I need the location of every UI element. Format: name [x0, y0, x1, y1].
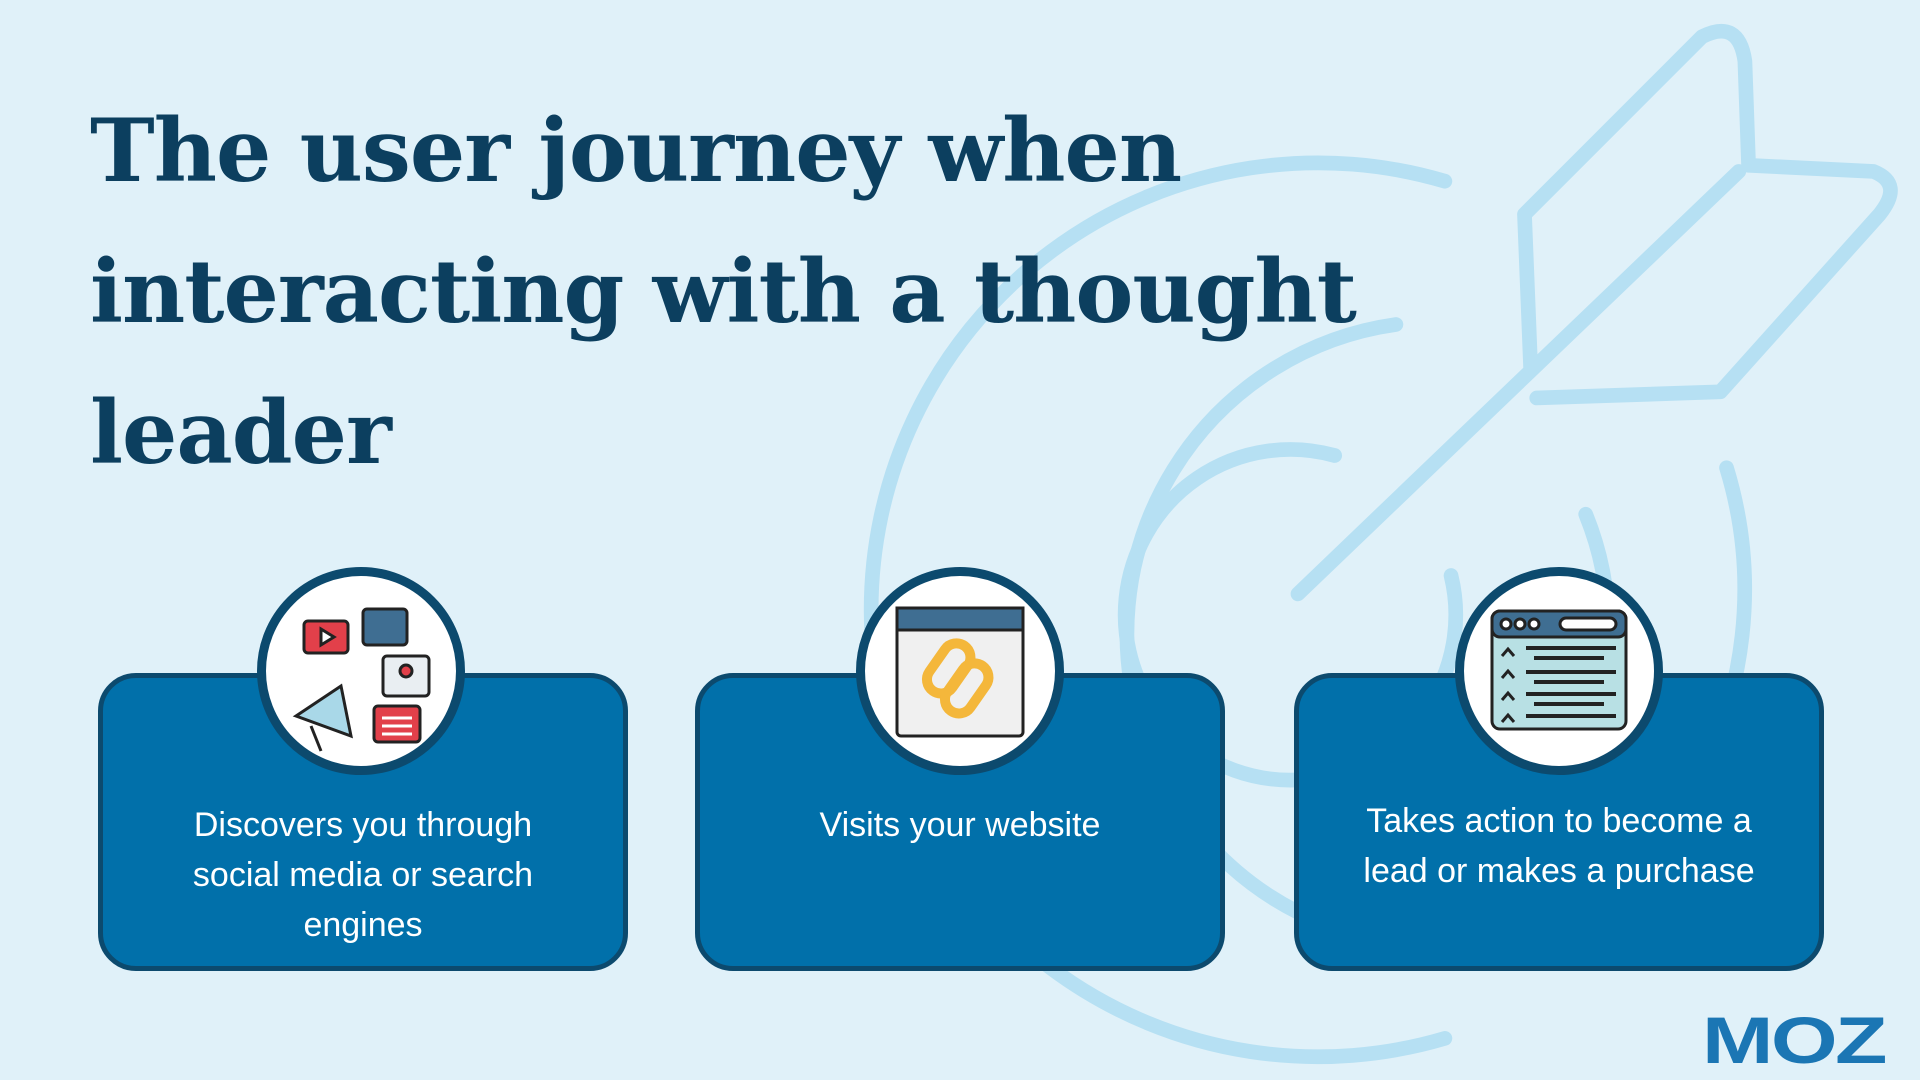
card 3: takes action — [1294, 673, 1824, 971]
card 1: discovers: engines — [303, 906, 423, 944]
card 1: discovers — [98, 673, 628, 971]
card 2: visits — [695, 673, 1225, 971]
card 1: discovers: Discovers you through — [194, 806, 532, 844]
card 1: discovers: social media or search — [193, 856, 533, 894]
icon: social media — [257, 567, 465, 775]
card 3: takes action: lead or makes a purchase — [1363, 852, 1755, 890]
card 2: visits: Visits your website — [820, 806, 1100, 844]
icon: link — [856, 567, 1064, 775]
logo: MOZ: MOZ — [1702, 1003, 1885, 1077]
title: The user journey when interacting with a thought leader — [90, 99, 1356, 484]
card 3: takes action: Takes action to become a — [1366, 802, 1752, 840]
icon: browser list — [1455, 567, 1663, 775]
